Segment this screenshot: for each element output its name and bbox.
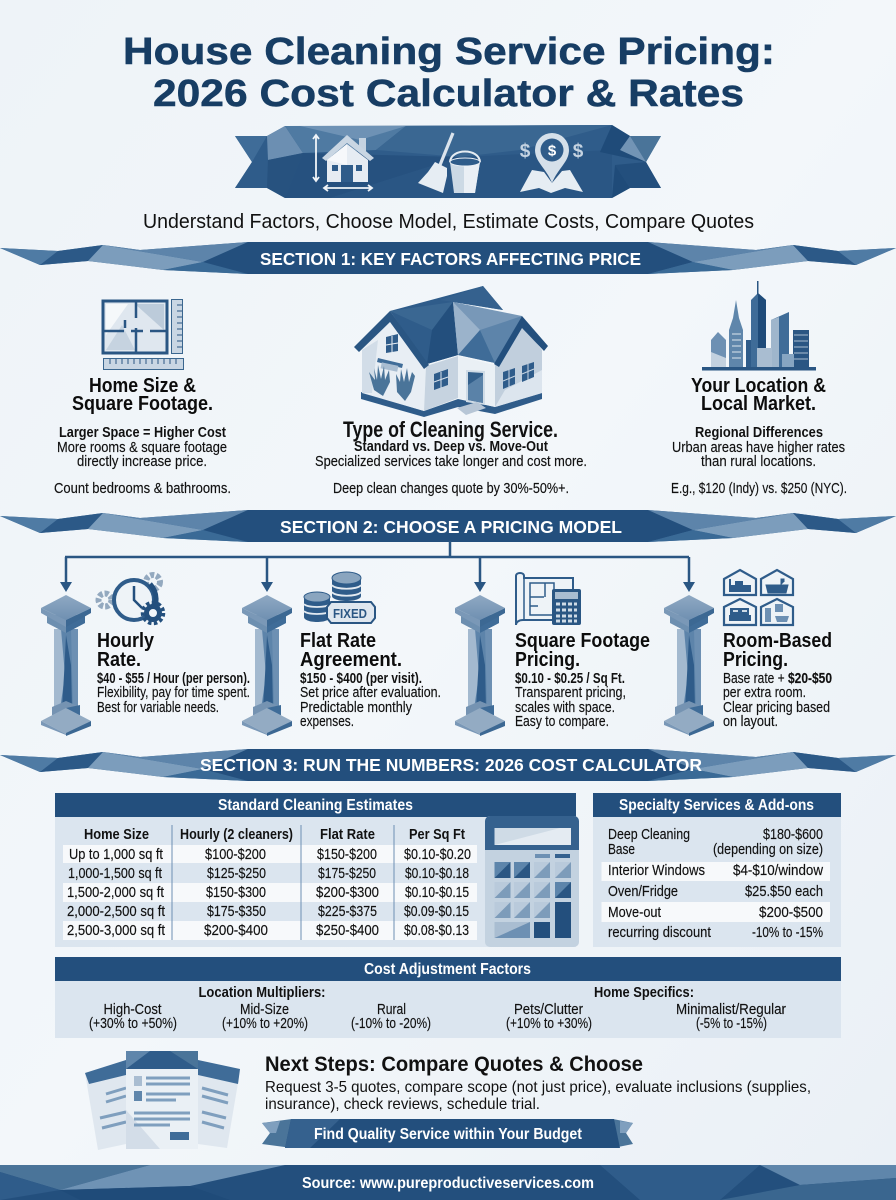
home specifics: (+10% to +30%) (506, 1016, 592, 1032)
heading: room-based (723, 630, 832, 671)
text: hourly details (97, 671, 250, 716)
home specifics: Home Specifics: (594, 985, 694, 1001)
location multipliers (89, 985, 431, 1032)
text: home size details (54, 425, 231, 497)
heading: home size: Square Footage. (72, 393, 213, 415)
table: $225-$375 (318, 903, 377, 920)
text: location details: Regional Differences (695, 425, 823, 441)
panel: hourly rate (41, 575, 250, 736)
table: Flat Rate (320, 827, 375, 843)
list of add-on prices: $4-$10/window (733, 862, 823, 879)
title (123, 31, 775, 115)
table: $0.10-$0.20 (404, 846, 471, 863)
text: square footage details: $0.10 - $0.25 / Sq Ft. (515, 671, 625, 687)
section 3 ribbon: SECTION 3: RUN THE NUMBERS: 2026 COST CALCULATOR (200, 755, 702, 775)
panel header (55, 793, 576, 817)
panel: cost adjustment factors (55, 957, 841, 1038)
arrows: connector to four pricing models (60, 541, 695, 592)
icon: floor plan with rulers (103, 300, 184, 370)
text: hourly details: Best for variable needs. (97, 700, 219, 716)
panel: standard cleaning estimates (55, 793, 579, 947)
heading: type of cleaning service: Type of Cleaning Service. (343, 417, 558, 442)
location multipliers: (+10% to +20%) (222, 1016, 308, 1032)
table: $150-$200 (317, 846, 377, 863)
table: Up to 1,000 sq ft (69, 846, 164, 863)
text: flat rate details: Set price after evaluation. (300, 685, 441, 701)
text: flat rate details: $150 - $400 (per visit). (300, 671, 422, 687)
heading: home size (72, 375, 213, 415)
heading: room-based: Pricing. (723, 649, 788, 671)
panel: specialty services and add-ons (593, 793, 841, 947)
icon: map pin with dollars: $ (520, 141, 531, 162)
home specifics: (-5% to -15%) (696, 1016, 767, 1032)
table: Home Size (84, 827, 149, 843)
list of add-on prices: recurring discount (608, 924, 712, 941)
location multipliers: Location Multipliers: (198, 985, 326, 1001)
heading: location: Your Location & (691, 375, 826, 397)
footer band: Source: www.pureproductiveservices.com (302, 1175, 594, 1192)
icon: map pin with dollars: $ (548, 142, 557, 160)
table: Hourly (2 cleaners) (180, 827, 293, 843)
icon: coins with fixed badge (304, 572, 375, 623)
list of add-on prices: Move-out (608, 904, 662, 921)
text: cleaning service details: Deep clean changes quote by 30%-50%+. (333, 481, 569, 497)
home specifics: Minimalist/Regular (676, 1002, 786, 1018)
text: square footage details: Transparent pricing, (515, 685, 626, 701)
text: location details: than rural locations. (701, 454, 816, 470)
text: location details (671, 425, 847, 497)
list of add-on prices: Oven/Fridge (608, 883, 678, 900)
footer band (0, 1165, 896, 1200)
icon: blueprint and calculator (516, 573, 581, 625)
text: room-based details: Clear pricing based (723, 700, 830, 716)
icon: map pin with dollars: $ (573, 141, 584, 162)
table: $0.09-$0.15 (404, 903, 469, 920)
title: 2026 Cost Calculator & Rates (153, 73, 744, 115)
home specifics: Pets/Clutter (514, 1002, 583, 1018)
heading: location: Local Market. (701, 393, 816, 415)
text: flat rate details: expenses. (300, 714, 354, 730)
text: home size details: Larger Space = Higher Cost (59, 425, 226, 441)
location multipliers: (-10% to -20%) (351, 1016, 431, 1032)
text: cleaning service details: Standard vs. Deep vs. Move-Out (354, 439, 548, 455)
table: $175-$250 (318, 865, 376, 882)
text: room-based details: per extra room. (723, 685, 806, 701)
location multipliers: Mid-Size (240, 1002, 289, 1018)
text: square footage details (515, 671, 626, 730)
table: Per Sq Ft (409, 827, 465, 843)
icon: calculator (485, 816, 579, 947)
list of add-on prices: (depending on size) (713, 841, 823, 858)
text: room-based details: on layout. (723, 714, 778, 730)
text: location details: Urban areas have higher rates (672, 440, 845, 456)
list of add-on prices: -10% to -15% (752, 924, 823, 941)
panel header: Standard Cleaning Estimates (218, 797, 413, 814)
section 2 ribbon: SECTION 2: CHOOSE A PRICING MODEL (280, 517, 622, 537)
icon: house with cleaning gloves (354, 286, 548, 417)
heading: square footage (515, 630, 650, 671)
panel header (55, 957, 841, 981)
text: home size details: directly increase price. (77, 454, 207, 470)
text: home size details: Count bedrooms & bathrooms. (54, 481, 231, 497)
icon: coins with fixed badge: FIXED (333, 606, 367, 621)
list of add-on prices: Base (608, 841, 635, 858)
list of add-on prices (608, 826, 823, 941)
text: next steps body: Request 3-5 quotes, compare scope (not just price), evaluate inclusions (supplies, (265, 1079, 811, 1096)
text: room-based details (723, 671, 832, 730)
list of add-on prices: $200-$500 (759, 904, 823, 921)
table: $100-$200 (205, 846, 266, 863)
icon: quote documents (85, 1051, 240, 1150)
heading: home size: Home Size & (89, 375, 196, 397)
text: room-based details: Base rate + $20-$50 (723, 671, 832, 687)
text: hourly details: Flexibility, pay for time spent. (97, 685, 250, 701)
panel header: Specialty Services & Add-ons (619, 797, 814, 814)
heading: next steps: Next Steps: Compare Quotes & Choose (265, 1053, 643, 1076)
home specifics (506, 985, 786, 1032)
pillar (664, 595, 714, 736)
pillar (242, 595, 292, 736)
list of add-on prices: $180-$600 (763, 826, 823, 843)
text: home size details: More rooms & square footage (57, 440, 227, 456)
panel: flat rate (242, 572, 441, 736)
title: House Cleaning Service Pricing: (123, 31, 775, 73)
ribbon: find quality service (262, 1119, 633, 1148)
section 3 ribbon (0, 749, 896, 781)
text: cleaning service details: Specialized services take longer and cost more. (315, 454, 587, 470)
heading: square footage: Square Footage (515, 630, 650, 652)
table: $150-$300 (206, 884, 266, 901)
ribbon: find quality service: Find Quality Service within Your Budget (314, 1126, 582, 1143)
heading: flat rate (300, 630, 402, 671)
table: $250-$400 (316, 922, 379, 939)
table: 2,000-2,500 sq ft (67, 903, 166, 920)
icon: four room tiles (724, 570, 793, 625)
table: $0.10-$0.15 (405, 884, 469, 901)
text: flat rate details: Predictable monthly (300, 700, 413, 716)
panel: type of cleaning service (315, 286, 587, 497)
table (63, 825, 477, 940)
text: next steps body: insurance), check reviews, schedule trial. (265, 1096, 540, 1113)
table: 2,500-3,000 sq ft (67, 922, 166, 939)
heading: hourly rate (97, 630, 155, 671)
table: $200-$400 (204, 922, 268, 939)
icon: house with size arrows (313, 135, 374, 191)
table: 1,000-1,500 sq ft (68, 865, 163, 882)
heading: flat rate: Agreement. (300, 649, 402, 671)
heading: location (691, 375, 826, 415)
panel header (593, 793, 841, 817)
text: square footage details: scales with space. (515, 700, 615, 716)
list of add-on prices: Deep Cleaning (608, 826, 690, 843)
table: $0.10-$0.18 (405, 865, 469, 882)
location multipliers: (+30% to +50%) (89, 1016, 177, 1032)
location multipliers: High-Cost (104, 1002, 162, 1018)
text: location details: E.g., $120 (Indy) vs. $250 (NYC). (671, 481, 847, 497)
icon: map pin with dollars (520, 133, 584, 193)
text: flat rate details (300, 671, 441, 730)
pillar (455, 595, 505, 736)
text: next steps body (265, 1079, 811, 1113)
list of add-on prices: Interior Windows (608, 862, 705, 879)
icon: city skyline (702, 281, 816, 370)
panel: square footage (455, 573, 650, 736)
heading: square footage: Pricing. (515, 649, 580, 671)
icon: broom and bucket (418, 133, 480, 193)
panel: home size (54, 300, 231, 497)
subtitle: Understand Factors, Choose Model, Estimate Costs, Compare Quotes (143, 211, 754, 233)
table: 1,500-2,000 sq ft (67, 884, 165, 901)
icon: clock and gears (98, 575, 164, 624)
panel: room-based (664, 570, 832, 736)
pillar (41, 595, 91, 736)
heading: flat rate: Flat Rate (300, 630, 376, 652)
table: $175-$350 (207, 903, 266, 920)
heading: hourly rate: Hourly (97, 630, 155, 652)
location multipliers: Rural (377, 1002, 406, 1018)
panel: location (671, 281, 847, 497)
table: $125-$250 (207, 865, 266, 882)
heading: hourly rate: Rate. (97, 649, 141, 671)
section 2 ribbon (0, 510, 896, 542)
section 1 ribbon (0, 242, 896, 274)
text: hourly details: $40 - $55 / Hour (per person). (97, 671, 250, 687)
heading: room-based: Room-Based (723, 630, 832, 652)
text: cleaning service details (315, 439, 587, 497)
panel: next steps (85, 1051, 811, 1150)
text: square footage details: Easy to compare. (515, 714, 609, 730)
list of add-on prices: $25.$50 each (745, 883, 823, 900)
section 1 ribbon: SECTION 1: KEY FACTORS AFFECTING PRICE (260, 249, 641, 269)
table: $0.08-$0.13 (404, 922, 469, 939)
panel header: Cost Adjustment Factors (364, 961, 531, 978)
table: $200-$300 (316, 884, 379, 901)
banner with three icons (235, 125, 661, 198)
